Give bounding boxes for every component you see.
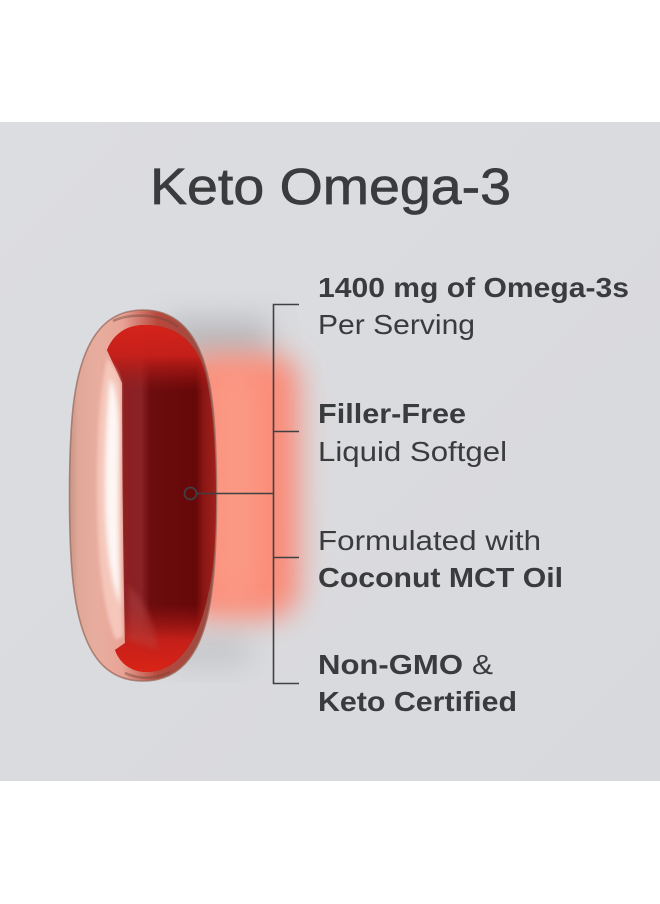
text block: certifications: Keto Certified	[318, 686, 517, 717]
text block: omega-3 amount	[318, 272, 629, 340]
text block: coconut MCT oil: Coconut MCT Oil	[318, 562, 563, 593]
glow and shadow behind softgel	[165, 318, 298, 665]
text block: coconut MCT oil	[318, 525, 563, 593]
text block: certifications: &	[472, 649, 493, 680]
text block: filler-free	[318, 398, 507, 467]
bracket connector	[184, 304, 299, 684]
text block: omega-3 amount: Per Serving	[318, 309, 475, 340]
text block: filler-free: Filler-Free	[318, 398, 466, 429]
panel: background	[0, 122, 660, 781]
highlight	[97, 358, 123, 640]
title: Keto Omega-3	[150, 158, 511, 215]
text block: coconut MCT oil: Formulated with	[318, 525, 541, 556]
text block: certifications	[318, 649, 517, 717]
icon: softgel capsule	[70, 310, 220, 681]
text block: filler-free: Liquid Softgel	[318, 436, 507, 467]
text block: certifications: Non-GMO	[318, 649, 463, 680]
text block: omega-3 amount: 1400 mg of Omega-3s	[318, 272, 629, 303]
